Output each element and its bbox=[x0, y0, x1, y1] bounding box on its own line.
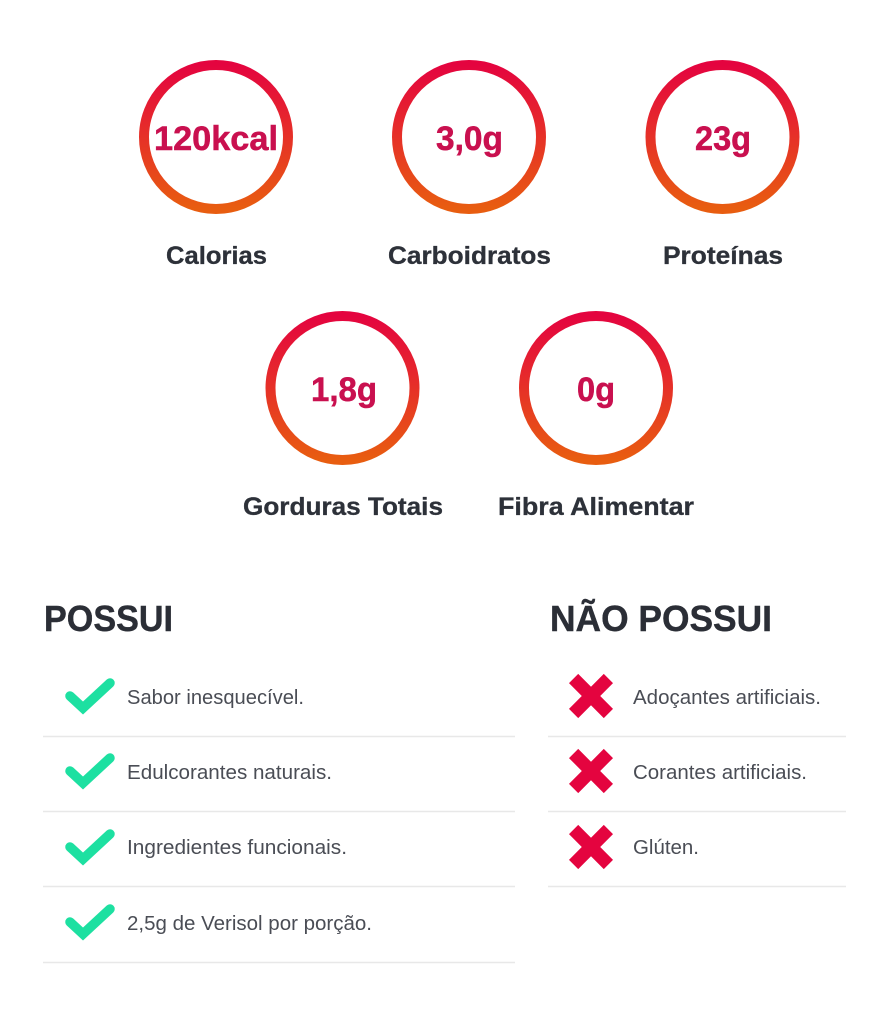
item: edulcorantes bbox=[70, 758, 332, 784]
item: sabor bbox=[70, 683, 304, 709]
text: verisol: 2,5g de Verisol por porção. bbox=[127, 913, 372, 935]
icon: check bbox=[70, 758, 110, 783]
text: corantes: Corantes artificiais. bbox=[633, 762, 807, 784]
item: ingredientes bbox=[70, 834, 347, 859]
value: 0g: 0g bbox=[577, 371, 615, 409]
icon: cross bbox=[574, 678, 608, 714]
text: glúten: Glúten. bbox=[633, 837, 699, 859]
ring: fibra alimentar bbox=[524, 316, 668, 460]
heading: possui: POSSUI bbox=[44, 598, 173, 639]
stat: carboidratos bbox=[388, 65, 551, 270]
label: fibra alimentar: Fibra Alimentar bbox=[498, 493, 694, 521]
icon: cross bbox=[574, 754, 608, 788]
label: calorias: Calorias bbox=[166, 242, 267, 270]
ring: proteínas bbox=[650, 65, 794, 209]
ring: calorias bbox=[144, 65, 288, 209]
label: carboidratos: Carboidratos bbox=[388, 242, 551, 270]
ring: carboidratos bbox=[397, 65, 541, 209]
text: edulcorantes: Edulcorantes naturais. bbox=[127, 762, 332, 784]
text: adoçantes: Adoçantes artificiais. bbox=[633, 687, 821, 709]
item: verisol bbox=[70, 909, 372, 935]
stat: proteínas bbox=[650, 65, 794, 270]
label: proteínas: Proteínas bbox=[663, 242, 783, 270]
icon: check bbox=[70, 909, 110, 934]
value: 23g: 23g bbox=[695, 120, 751, 158]
value: 1,8g: 1,8g bbox=[311, 371, 377, 409]
text: ingredientes: Ingredientes funcionais. bbox=[127, 837, 347, 859]
heading: não possui: NÃO POSSUI bbox=[550, 597, 772, 639]
panel: possui bbox=[43, 598, 515, 962]
item: glúten bbox=[574, 830, 699, 864]
stat: calorias bbox=[144, 65, 288, 270]
value: 3,0g: 3,0g bbox=[436, 120, 503, 158]
icon: cross bbox=[574, 830, 608, 864]
panel: não possui bbox=[548, 597, 846, 886]
label: gorduras totais: Gorduras Totais bbox=[243, 493, 443, 521]
ring: gorduras totais bbox=[270, 316, 414, 460]
item: corantes bbox=[574, 754, 807, 788]
icon: check bbox=[70, 683, 110, 708]
icon: check bbox=[70, 834, 110, 859]
item: adoçantes bbox=[574, 678, 821, 714]
stat: gorduras totais bbox=[243, 316, 443, 521]
panel: nutrition facts bbox=[144, 65, 794, 521]
stat: fibra alimentar bbox=[498, 316, 694, 521]
text: sabor: Sabor inesquecível. bbox=[127, 687, 304, 709]
value: 120kcal: 120kcal bbox=[154, 120, 278, 158]
